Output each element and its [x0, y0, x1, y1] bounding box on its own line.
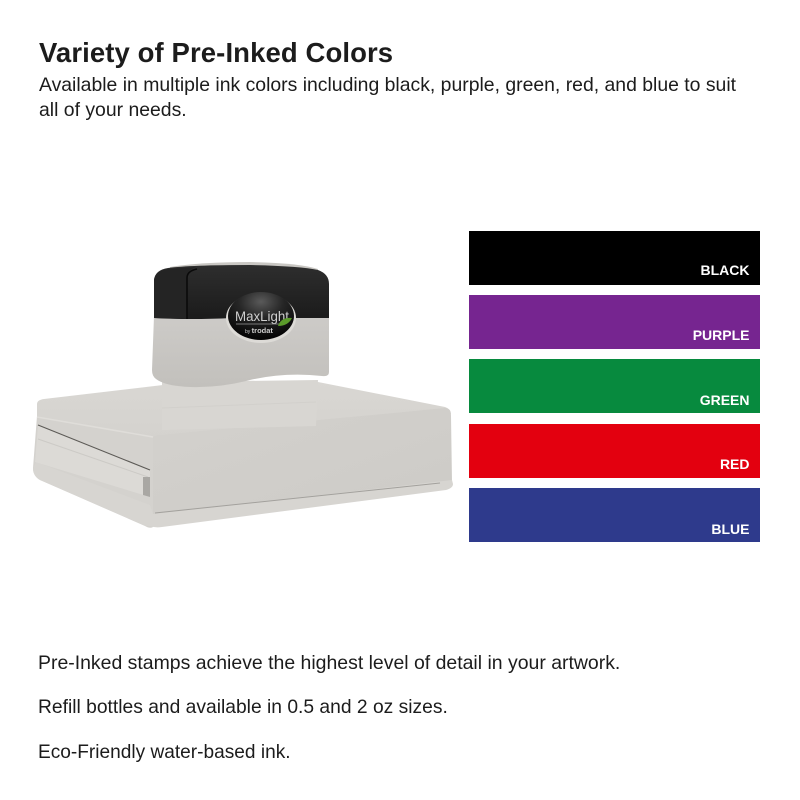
MaxLight logo: by trodat: [245, 326, 273, 335]
title: Variety of Pre-Inked Colors: [39, 37, 393, 68]
box bottom lip: [33, 462, 453, 527]
feature: refill bottles: Refill bottles and available in 0.5 and 2 oz sizes.: [38, 697, 448, 718]
stamp body: [152, 262, 329, 387]
colour swatch: blue: [469, 488, 760, 542]
colour swatch: blue: BLUE: [711, 520, 750, 536]
stamp grey body: [152, 316, 329, 387]
colour swatch: purple: [469, 295, 760, 349]
colour swatch: black: BLACK: [700, 262, 750, 278]
colour swatch: green: [469, 359, 760, 413]
ink pad box: [33, 382, 453, 528]
stamp reflection: [162, 380, 318, 430]
feature: detail: Pre-Inked stamps achieve the highest level of detail in your artwork.: [38, 652, 620, 674]
box left side: [33, 416, 153, 528]
intro text: all of your needs.: [39, 99, 187, 121]
colour swatch: red: [469, 424, 760, 478]
ink pad drawer: [35, 425, 150, 497]
stamp black cap: [154, 265, 329, 319]
intro text: Available in multiple ink colors including black, purple, green, red, and blue to suit: [39, 74, 736, 96]
MaxLight logo: [226, 292, 296, 343]
colour swatch: green: GREEN: [700, 392, 750, 408]
colour swatch: purple: PURPLE: [693, 327, 750, 343]
box top surface: [37, 382, 451, 440]
colour swatch: red: RED: [720, 456, 750, 472]
intro text: [39, 74, 736, 121]
colour swatch: black: [469, 230, 760, 284]
MaxLight logo: MaxLight: [235, 308, 289, 324]
stamp cap side facet: [154, 267, 196, 319]
stamp top back strip: [170, 262, 318, 272]
feature: eco-friendly ink: Eco-Friendly water-based ink.: [38, 742, 291, 763]
box front face: [153, 408, 452, 516]
